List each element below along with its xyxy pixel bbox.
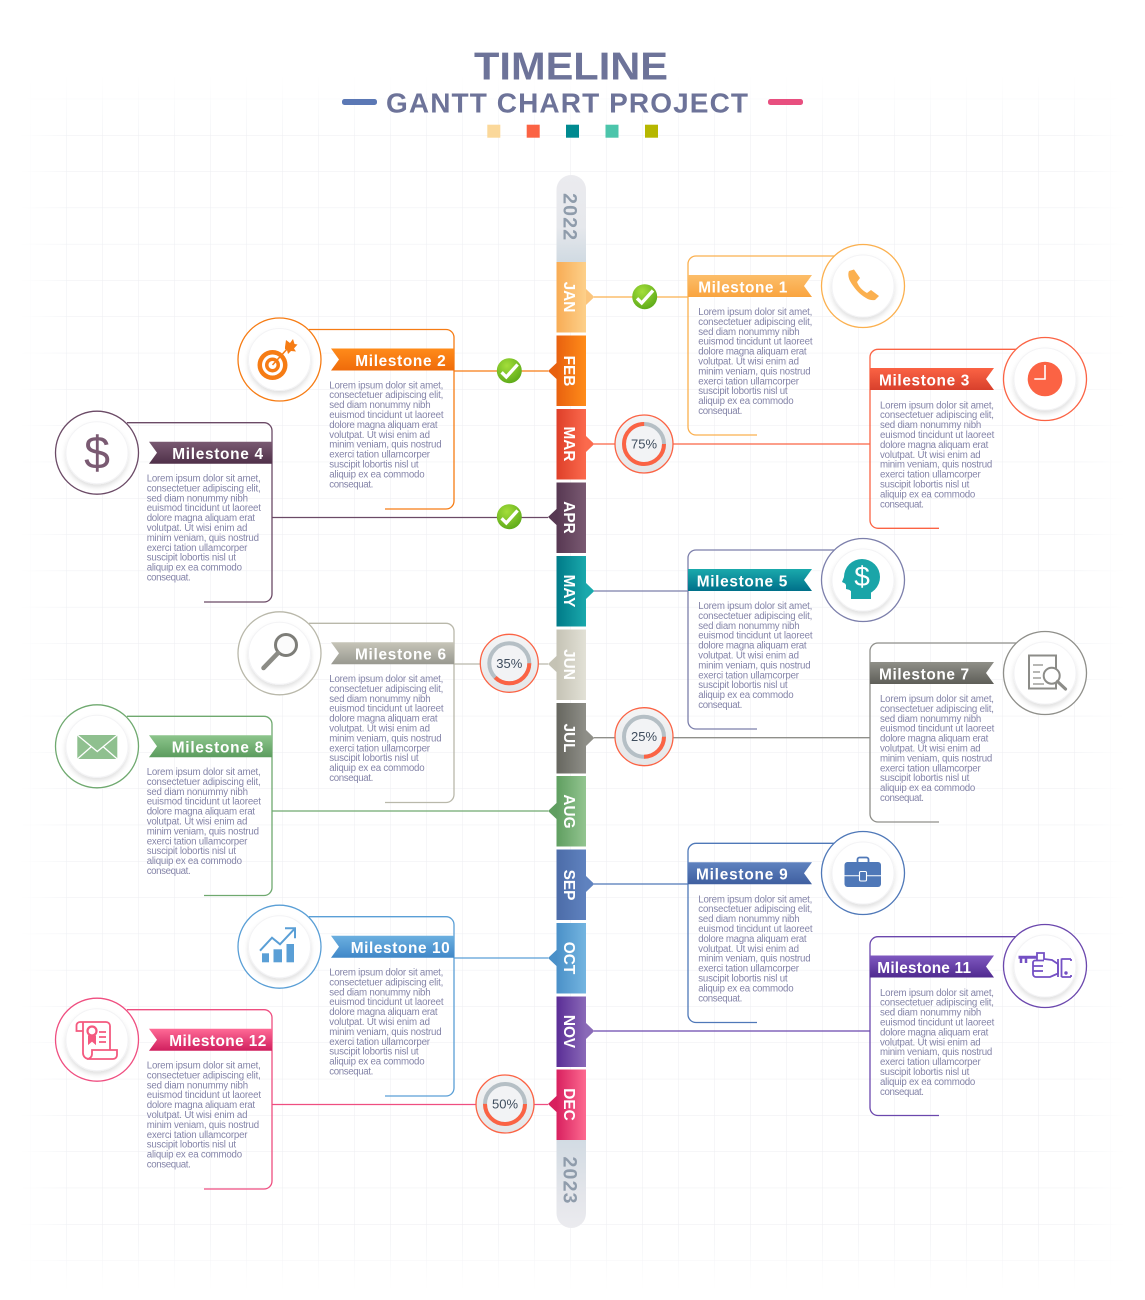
panel: milestone 2: [238, 318, 548, 509]
icon: head with dollar: $: [854, 561, 870, 592]
icon circle: [822, 832, 904, 914]
body text: sed diam nonummy nibh: [880, 420, 981, 431]
icon: magnifier: [264, 634, 296, 668]
body text: dolore magna aliquam erat: [698, 934, 807, 945]
connector: [454, 370, 548, 372]
year cap 2022: [556, 175, 586, 262]
body text: [880, 988, 995, 1098]
body text: sed diam nonummy nibh: [147, 1080, 248, 1091]
banner: [688, 862, 812, 884]
body text: euismod tincidunt ut laoreet: [880, 1017, 995, 1028]
body text: minim veniam, quis nostrud: [147, 533, 259, 544]
body text: aliquip ex ea commodo: [880, 1077, 975, 1088]
body text: consectetuer adipiscing elit,: [147, 483, 261, 494]
body text: suscipit lobortis nisl ut: [698, 973, 788, 984]
body text: volutpat. Ut wisi enim ad: [698, 356, 799, 368]
body text: euismod tincidunt ut laoreet: [147, 503, 261, 514]
body text: aliquip ex ea commodo: [698, 396, 794, 407]
body text: Lorem ipsum dolor sit amet,: [147, 767, 261, 778]
progress ring 25%: 25%: [631, 729, 657, 744]
body text: minim veniam, quis nostrud: [880, 753, 992, 764]
body text: euismod tincidunt ut laoreet: [698, 631, 813, 642]
month DEC: [548, 1070, 586, 1140]
status: check FEB: [497, 358, 522, 383]
banner: [870, 662, 994, 684]
month JUN: [548, 630, 586, 700]
body text: volutpat. Ut wisi enim ad: [147, 1110, 248, 1121]
body text: euismod tincidunt ut laoreet: [698, 924, 813, 935]
body text: euismod tincidunt ut laoreet: [147, 1090, 261, 1101]
body text: volutpat. Ut wisi enim ad: [147, 523, 247, 534]
body text: consectetuer adipiscing elit,: [147, 1070, 261, 1081]
panel: milestone 6: [238, 612, 548, 802]
frame: [870, 643, 1016, 822]
frame: [127, 1010, 272, 1189]
banner: [331, 348, 454, 370]
body text: volutpat. Ut wisi enim ad: [329, 724, 430, 734]
body text: [329, 380, 444, 490]
body text: minim veniam, quis nostrud: [147, 826, 259, 837]
month JUL: [556, 703, 594, 774]
banner label: Milestone 5: [697, 573, 788, 590]
year cap 2023: 2023: [558, 1156, 580, 1204]
progress ring 50%: 50%: [492, 1096, 518, 1112]
status: check APR: [497, 504, 522, 529]
month NOV: NOV: [560, 1015, 577, 1049]
body text: aliquip ex ea commodo: [880, 489, 975, 500]
body text: sed diam nonummy nibh: [147, 787, 248, 798]
progress ring 25%: [615, 708, 673, 766]
connector: [454, 663, 548, 665]
body text: Lorem ipsum dolor sit amet,: [329, 968, 443, 978]
body text: consequat.: [329, 479, 373, 490]
body text: consequat.: [698, 700, 742, 711]
month JUN: JUN: [560, 649, 577, 680]
icon: phone: [848, 270, 879, 300]
body text: sed diam nonummy nibh: [698, 914, 800, 925]
body text: Lorem ipsum dolor sit amet,: [147, 474, 261, 484]
month SEP: SEP: [560, 870, 577, 900]
body text: sed diam nonummy nibh: [880, 1008, 981, 1019]
body text: volutpat. Ut wisi enim ad: [329, 1017, 430, 1028]
body text: sed diam nonummy nibh: [880, 714, 981, 725]
month AUG: AUG: [560, 794, 577, 829]
body text: consequat.: [147, 572, 191, 584]
banner label: Milestone 7: [879, 666, 969, 683]
frame: [309, 917, 454, 1096]
body text: aliquip ex ea commodo: [147, 563, 242, 574]
body text: euismod tincidunt ut laoreet: [329, 704, 444, 715]
body text: dolore magna aliquam erat: [147, 513, 255, 524]
body text: Lorem ipsum dolor sit amet,: [329, 674, 443, 685]
body text: volutpat. Ut wisi enim ad: [698, 650, 799, 662]
title: [342, 45, 803, 138]
body text: Lorem ipsum dolor sit amet,: [698, 894, 812, 905]
banner: [331, 936, 454, 958]
panel: milestone 5: [594, 538, 904, 729]
icon: certificate scroll: [76, 1022, 117, 1059]
banner label: Milestone 2: [355, 353, 446, 370]
body text: aliquip ex ea commodo: [698, 690, 794, 701]
panel: milestone 10: [238, 905, 548, 1096]
icon: document search: [1029, 656, 1066, 689]
heading: gantt chart project: GANTT CHART PROJECT: [386, 87, 748, 118]
body text: euismod tincidunt ut laoreet: [147, 797, 261, 808]
frame: [309, 330, 454, 509]
body text: Lorem ipsum dolor sit amet,: [147, 1060, 261, 1072]
icon: target: [258, 339, 298, 380]
month SEP: [556, 850, 594, 920]
body text: minim veniam, quis nostrud: [329, 733, 442, 744]
icon circle: [238, 318, 321, 401]
body text: sed diam nonummy nibh: [698, 327, 800, 338]
connector: [594, 737, 870, 739]
body text: exerci tation ullamcorper: [880, 763, 981, 774]
body text: dolore magna aliquam erat: [698, 347, 807, 358]
month APR: [548, 482, 586, 553]
body text: exerci tation ullamcorper: [329, 1037, 431, 1048]
panel: milestone 8: [56, 705, 548, 896]
month MAY: [556, 556, 594, 626]
body text: suscipit lobortis nisl ut: [147, 846, 236, 857]
banner: [870, 956, 994, 978]
body text: consequat.: [698, 993, 742, 1004]
panel: milestone 9: [594, 832, 904, 1022]
month JAN: JAN: [560, 282, 577, 312]
icon: clock: [1028, 362, 1062, 396]
frame: [127, 423, 272, 602]
body text: euismod tincidunt ut laoreet: [880, 430, 995, 441]
body text: sed diam nonummy nibh: [147, 493, 248, 504]
month DEC: DEC: [560, 1088, 577, 1121]
body text: aliquip ex ea commodo: [698, 983, 794, 994]
frame: [688, 550, 834, 729]
body text: minim veniam, quis nostrud: [698, 954, 811, 965]
connector: [272, 810, 548, 812]
month FEB: [548, 336, 586, 406]
body text: minim veniam, quis nostrud: [880, 460, 992, 471]
colour squares: [487, 125, 658, 138]
month MAR: MAR: [560, 426, 577, 462]
icon circle: [1004, 338, 1086, 420]
month NOV: [556, 996, 594, 1067]
banner label: Milestone 8: [172, 740, 264, 757]
panel: milestone 11: [594, 924, 1086, 1116]
body text: exerci tation ullamcorper: [147, 543, 248, 554]
body text: exerci tation ullamcorper: [880, 1057, 981, 1068]
body text: euismod tincidunt ut laoreet: [698, 337, 813, 348]
banner label: Milestone 10: [351, 940, 450, 957]
body text: [147, 474, 261, 584]
body text: exerci tation ullamcorper: [698, 670, 800, 681]
body text: dolore magna aliquam erat: [329, 1007, 438, 1018]
icon circle: [1004, 632, 1086, 714]
icon circle: [822, 538, 904, 622]
connector: [594, 883, 688, 885]
banner: [149, 735, 272, 757]
body text: sed diam nonummy nibh: [329, 987, 431, 998]
connector: [594, 590, 688, 592]
body text: minim veniam, quis nostrud: [880, 1047, 992, 1058]
icon circle: [238, 612, 321, 695]
body text: volutpat. Ut wisi enim ad: [880, 744, 981, 754]
body text: volutpat. Ut wisi enim ad: [698, 944, 799, 955]
body text: suscipit lobortis nisl ut: [329, 753, 419, 764]
icon circle: [56, 705, 138, 788]
banner: [688, 275, 812, 297]
body text: volutpat. Ut wisi enim ad: [880, 1037, 981, 1048]
connector: [454, 957, 548, 959]
icon circle: [56, 411, 138, 494]
icon: envelope: [77, 735, 117, 759]
body text: dolore magna aliquam erat: [880, 440, 989, 451]
progress ring 75%: [615, 415, 673, 473]
body text: aliquip ex ea commodo: [329, 763, 425, 774]
body text: Lorem ipsum dolor sit amet,: [329, 380, 443, 391]
icon circle: [56, 998, 138, 1081]
body text: consequat.: [147, 866, 191, 877]
banner: [688, 569, 812, 591]
body text: suscipit lobortis nisl ut: [329, 459, 419, 470]
body text: volutpat. Ut wisi enim ad: [880, 450, 981, 461]
body text: exerci tation ullamcorper: [147, 836, 248, 847]
body text: [329, 674, 444, 784]
body text: sed diam nonummy nibh: [329, 694, 431, 705]
body text: exerci tation ullamcorper: [147, 1130, 248, 1141]
connector: [272, 516, 548, 518]
month APR: APR: [560, 501, 577, 534]
body text: [147, 767, 261, 877]
icon circle: [1004, 924, 1086, 1008]
body text: exerci tation ullamcorper: [698, 964, 800, 975]
body text: dolore magna aliquam erat: [329, 420, 438, 431]
body text: consequat.: [880, 499, 924, 510]
progress ring 35%: [480, 634, 538, 692]
body text: aliquip ex ea commodo: [329, 1057, 425, 1068]
body text: suscipit lobortis nisl ut: [329, 1047, 419, 1058]
frame: [870, 937, 1016, 1116]
body text: euismod tincidunt ut laoreet: [880, 724, 995, 735]
month MAR: [556, 409, 594, 480]
body text: consequat.: [147, 1160, 191, 1170]
body text: suscipit lobortis nisl ut: [880, 1067, 970, 1078]
month OCT: OCT: [560, 942, 577, 975]
banner label: Milestone 11: [877, 960, 971, 977]
body text: consequat.: [880, 1087, 924, 1098]
icon: growth chart: [260, 928, 295, 962]
connector: [594, 296, 688, 298]
icon: briefcase: [844, 858, 881, 887]
body text: suscipit lobortis nisl ut: [147, 1140, 236, 1151]
body text: consectetuer adipiscing elit,: [329, 390, 443, 401]
body text: suscipit lobortis nisl ut: [698, 386, 788, 397]
body text: sed diam nonummy nibh: [698, 621, 800, 632]
body text: dolore magna aliquam erat: [880, 734, 989, 745]
body text: sed diam nonummy nibh: [329, 400, 431, 411]
body text: suscipit lobortis nisl ut: [880, 773, 970, 784]
body text: Lorem ipsum dolor sit amet,: [880, 988, 994, 999]
body text: consequat.: [329, 1066, 373, 1078]
body text: exerci tation ullamcorper: [329, 450, 431, 461]
body text: volutpat. Ut wisi enim ad: [147, 816, 247, 828]
banner label: Milestone 3: [879, 372, 969, 389]
frame: [688, 843, 834, 1022]
body text: exerci tation ullamcorper: [698, 376, 800, 387]
body text: minim veniam, quis nostrud: [698, 660, 811, 671]
body text: consectetuer adipiscing elit,: [698, 611, 812, 622]
banner label: Milestone 12: [169, 1033, 266, 1050]
body text: exerci tation ullamcorper: [880, 470, 981, 481]
body text: [880, 694, 995, 804]
body text: consectetuer adipiscing elit,: [147, 777, 261, 788]
body text: Lorem ipsum dolor sit amet,: [880, 400, 994, 411]
body text: aliquip ex ea commodo: [147, 856, 242, 867]
month JUL: JUL: [560, 723, 577, 753]
month OCT: [548, 923, 586, 994]
body text: minim veniam, quis nostrud: [329, 1027, 442, 1038]
panel: milestone 12: [56, 998, 548, 1189]
body text: exerci tation ullamcorper: [329, 743, 431, 754]
month FEB: FEB: [560, 356, 577, 386]
body text: suscipit lobortis nisl ut: [147, 553, 236, 564]
body text: aliquip ex ea commodo: [329, 469, 425, 480]
body text: consequat.: [698, 406, 742, 417]
body text: aliquip ex ea commodo: [147, 1150, 242, 1161]
body text: dolore magna aliquam erat: [147, 807, 255, 818]
body text: consectetuer adipiscing elit,: [329, 684, 443, 695]
body text: suscipit lobortis nisl ut: [880, 479, 970, 490]
icon: hand with key: [1018, 953, 1071, 977]
title bar right: [768, 99, 803, 105]
panel: milestone 1: [594, 244, 904, 435]
banner: [149, 442, 272, 464]
status: check JAN: [632, 284, 657, 309]
connector: [594, 1030, 870, 1032]
body text: aliquip ex ea commodo: [880, 783, 975, 794]
body text: Lorem ipsum dolor sit amet,: [880, 694, 994, 705]
title bar left: [342, 99, 377, 105]
body text: consectetuer adipiscing elit,: [880, 998, 994, 1009]
banner label: Milestone 6: [355, 647, 446, 664]
connector: [272, 1104, 548, 1106]
body text: [698, 894, 813, 1004]
progress ring 50%: [476, 1075, 534, 1133]
icon: dollar: $: [84, 426, 110, 478]
timeline spine: [548, 175, 594, 1228]
panel: milestone 3: [594, 338, 1086, 528]
progress ring 35%: 35%: [496, 656, 523, 671]
banner: [149, 1029, 272, 1051]
body text: [698, 307, 813, 417]
body text: dolore magna aliquam erat: [329, 714, 438, 725]
body text: consectetuer adipiscing elit,: [698, 904, 812, 915]
frame: [870, 349, 1016, 528]
progress ring 75%: 75%: [631, 436, 657, 452]
body text: consequat.: [329, 773, 373, 784]
body text: [698, 601, 813, 711]
banner label: Milestone 1: [698, 279, 788, 296]
body text: consectetuer adipiscing elit,: [698, 317, 812, 328]
year cap 2022: 2022: [558, 193, 580, 240]
body text: volutpat. Ut wisi enim ad: [329, 430, 430, 441]
frame: [309, 623, 454, 802]
body text: minim veniam, quis nostrud: [147, 1120, 259, 1131]
body text: [880, 400, 995, 510]
frame: [688, 256, 834, 435]
body text: euismod tincidunt ut laoreet: [329, 410, 444, 421]
body text: consectetuer adipiscing elit,: [329, 977, 443, 988]
month JAN: [556, 262, 594, 332]
connector: [594, 443, 870, 445]
body text: euismod tincidunt ut laoreet: [329, 997, 444, 1008]
body text: consequat.: [880, 793, 924, 804]
year cap 2023: [556, 1140, 586, 1228]
body text: consectetuer adipiscing elit,: [880, 704, 994, 715]
frame: [127, 716, 272, 896]
panel: milestone 7: [594, 632, 1086, 822]
body text: dolore magna aliquam erat: [880, 1027, 989, 1038]
body text: consectetuer adipiscing elit,: [880, 410, 994, 421]
banner label: Milestone 4: [172, 446, 263, 463]
body text: Lorem ipsum dolor sit amet,: [698, 307, 812, 318]
body text: [329, 968, 444, 1078]
icon circle: [822, 244, 904, 328]
body text: minim veniam, quis nostrud: [329, 440, 442, 451]
body text: dolore magna aliquam erat: [698, 641, 807, 652]
banner: [331, 642, 454, 664]
month AUG: [548, 776, 586, 846]
panel: milestone 4: [56, 411, 548, 602]
body text: suscipit lobortis nisl ut: [698, 680, 788, 691]
banner: [870, 368, 994, 390]
body text: Lorem ipsum dolor sit amet,: [698, 601, 812, 612]
icon: head with dollar: [842, 559, 880, 599]
body text: [147, 1060, 261, 1170]
banner label: Milestone 9: [696, 867, 788, 884]
body text: dolore magna aliquam erat: [147, 1100, 255, 1111]
icon circle: [238, 905, 321, 988]
body text: minim veniam, quis nostrud: [698, 366, 811, 377]
heading: timeline: TIMELINE: [474, 45, 668, 88]
month MAY: MAY: [560, 575, 577, 608]
